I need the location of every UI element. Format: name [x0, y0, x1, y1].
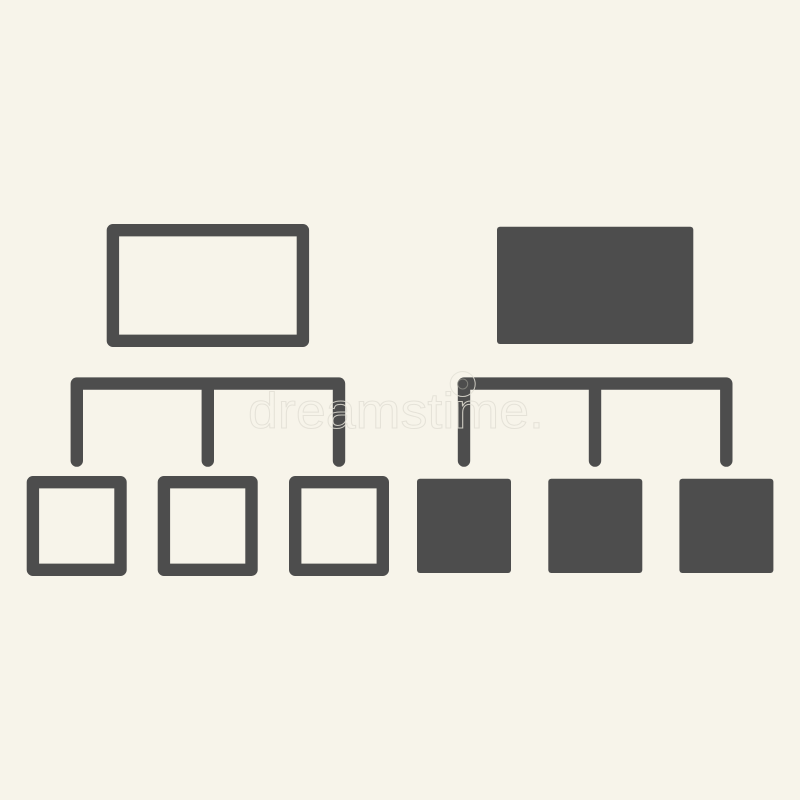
outline top box: [113, 230, 303, 341]
solid connector lines: [464, 384, 726, 461]
solid right box: [679, 479, 773, 573]
icon: outline hierarchy chart: [33, 230, 383, 570]
solid top box: [497, 227, 693, 344]
outline middle box: [164, 482, 252, 570]
watermark: dreamstime.: [248, 383, 544, 439]
outline left box: [33, 482, 120, 570]
outline connector lines: [77, 384, 339, 461]
solid left box: [417, 479, 511, 573]
icon: solid hierarchy chart: [417, 227, 773, 573]
solid middle box: [548, 479, 642, 573]
outline right box: [295, 482, 383, 570]
